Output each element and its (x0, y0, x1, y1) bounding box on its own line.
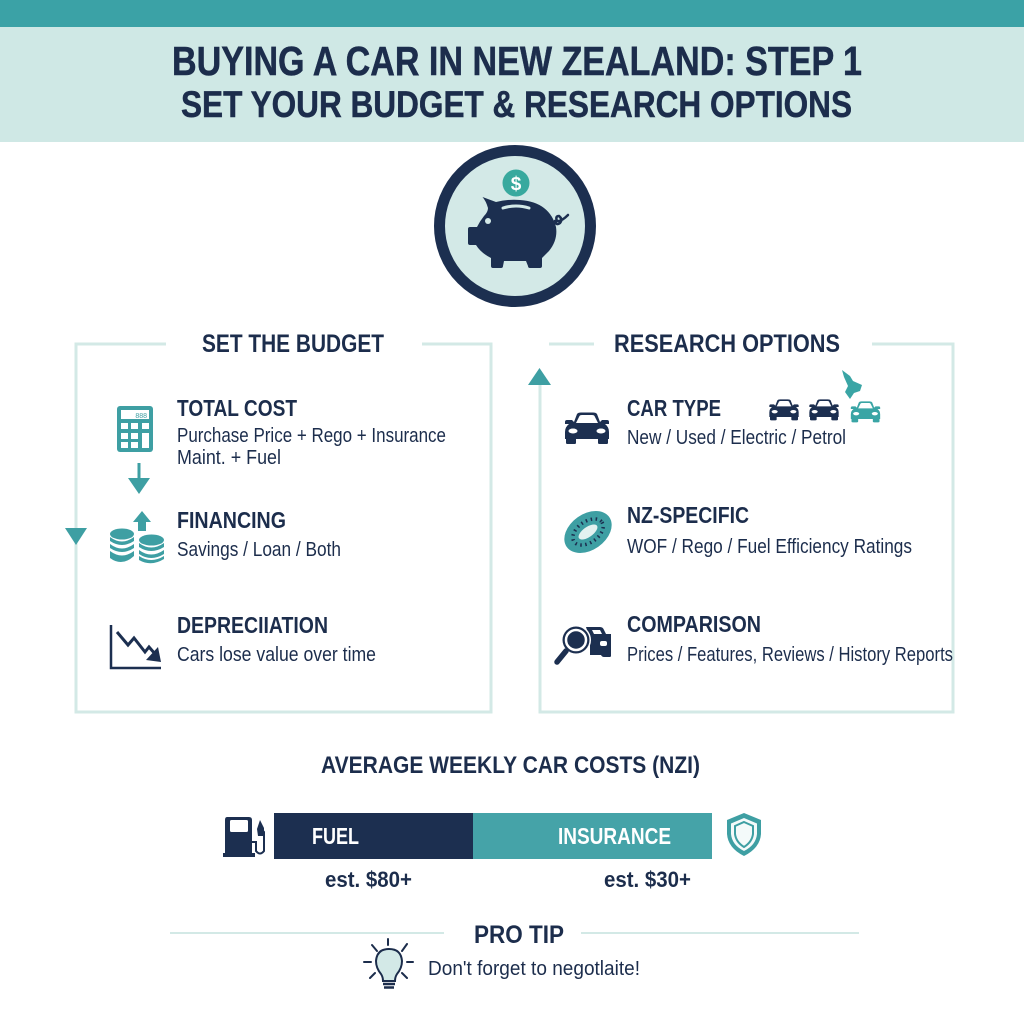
title: BUYING A CAR IN NEW ZEALAND: STEP 1 (172, 38, 862, 84)
text block: depreciation (177, 612, 376, 666)
heading: average weekly car costs: AVERAGE WEEKLY CAR COSTS (NZI) (321, 752, 700, 779)
bar: insurance: INSURANCE (558, 823, 671, 849)
heading: set the budget: SET THE BUDGET (202, 330, 384, 358)
panel: research options (528, 330, 953, 712)
text block: total cost: Maint. + Fuel (177, 447, 281, 469)
text block: comparison: Prices / Features, Reviews / History Reports (627, 644, 953, 666)
icon: pig (468, 197, 568, 268)
heading: pro tip: PRO TIP (474, 921, 564, 949)
bar chart: weekly costs (274, 813, 712, 859)
text block: nz-specific: NZ-SPECIFIC (627, 502, 749, 528)
icon: dollar coin: $ (511, 174, 522, 195)
icon: magnifier over car (557, 625, 611, 662)
text block: total cost: Purchase Price + Rego + Insurance (177, 425, 446, 447)
text block: depreciation: DEPRECIIATION (177, 612, 328, 638)
header panel (0, 27, 1024, 142)
text block: comparison (627, 611, 953, 666)
text: pro tip message: Don't forget to negotlaite! (428, 958, 640, 980)
icon: New Zealand map (842, 370, 862, 399)
label: fuel estimate: est. $80+ (325, 867, 412, 892)
icon: kiwi fruit slice (556, 502, 620, 562)
text block: financing (177, 507, 341, 561)
text block: car type: New / Used / Electric / Petrol (627, 427, 846, 449)
icon: depreciation chart (111, 625, 161, 668)
icon: dollar coin (502, 170, 530, 196)
icon: flow triangle down (65, 528, 87, 545)
text block: nz-specific: WOF / Rego / Fuel Efficiency Ratings (627, 536, 912, 558)
icon: flow triangle up (528, 368, 551, 385)
icon: car (565, 412, 609, 444)
bar: fuel: FUEL (312, 823, 359, 849)
icon: calculator (117, 406, 153, 452)
heading: research options: RESEARCH OPTIONS (614, 330, 840, 358)
panel: set the budget (65, 330, 491, 712)
icon: piggy bank badge (440, 150, 590, 302)
text block: financing: Savings / Loan / Both (177, 539, 341, 561)
icon: fuel pump (223, 817, 264, 857)
bar: fuel (274, 813, 473, 859)
text block: total cost (177, 395, 446, 469)
text block: comparison: COMPARISON (627, 611, 761, 637)
text block: financing: FINANCING (177, 507, 286, 533)
icon: light bulb (364, 939, 413, 988)
icon: three cars (769, 399, 880, 422)
top teal band (0, 0, 1024, 27)
label: insurance estimate: est. $30+ (604, 867, 691, 892)
icon: calculator: 888 (135, 413, 147, 420)
subtitle: SET YOUR BUDGET & RESEARCH OPTIONS (181, 84, 852, 125)
text block: car type (627, 395, 846, 449)
text block: depreciation: Cars lose value over time (177, 644, 376, 666)
bar: insurance (473, 813, 712, 859)
text block: total cost: TOTAL COST (177, 395, 297, 421)
icon: shield (727, 813, 761, 856)
icon: coin stacks (110, 511, 164, 563)
panel: pro tip (170, 921, 859, 988)
text block: nz-specific (627, 502, 912, 558)
arrow: calculator to financing (128, 463, 150, 494)
text block: car type: CAR TYPE (627, 395, 721, 421)
